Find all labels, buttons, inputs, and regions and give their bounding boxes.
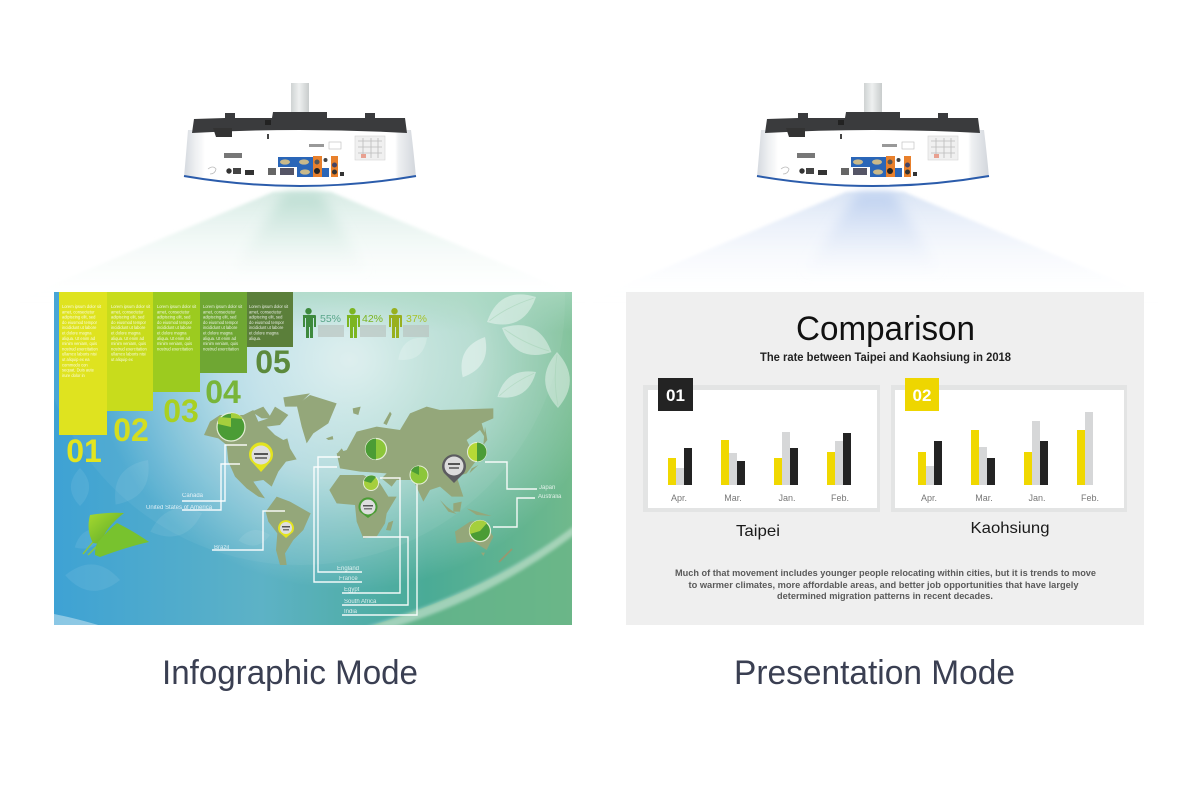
stat: 42 percent: 42%	[362, 313, 383, 325]
stripe text: 02: et dolore magna	[111, 330, 141, 336]
map marker: pie Europe	[366, 438, 386, 460]
map marker: pie Japan	[468, 442, 486, 462]
swoosh: bottom curve	[54, 526, 574, 627]
bars: Apr	[668, 448, 692, 485]
number 05: 05	[255, 344, 291, 380]
stripe text: 01: et dolore magna	[62, 330, 92, 336]
number 01: 01	[66, 433, 102, 469]
country labels: England	[337, 566, 359, 572]
caption: Presentation Mode: Presentation Mode	[734, 654, 1015, 692]
badge 02	[905, 378, 939, 411]
stripe text: 02: ullamco laboris nisi	[111, 352, 146, 357]
country labels: Australia	[538, 494, 562, 500]
country labels: Japan	[539, 485, 555, 491]
stripe text: 03: aliqua. Ut enim ad	[157, 336, 191, 341]
stripe text: 03: adipiscing elit, sed	[157, 315, 191, 320]
stripe text: 05: aliqua.	[249, 336, 261, 341]
stripe text: 04: amet, consectetur	[203, 309, 236, 314]
stat: 37 percent	[389, 308, 429, 338]
country labels: South Africa	[344, 599, 377, 605]
stripe text: 02: minim veniam, quis	[111, 341, 146, 346]
stripe text: 04: do eiusmod tempor	[203, 320, 239, 325]
paragraph: Much of that movement includes younger people relocating within cities, but it is trends to move	[675, 568, 1096, 579]
country labels: Canada	[182, 493, 204, 499]
country labels: United States of America	[146, 505, 213, 511]
number 03: 03	[163, 393, 199, 429]
stat: 37 percent: 37%	[406, 313, 427, 325]
projector: right	[757, 83, 989, 187]
stripe text: 05: incididunt ut labore	[249, 325, 284, 330]
stripe text: 05: amet, consectetur	[249, 309, 282, 314]
stripe text: 03: incididunt ut labore	[157, 325, 192, 330]
map pin: China	[442, 454, 466, 483]
stripe text: 01: ullamco laboris nisi	[62, 352, 97, 357]
label: Taipei: Taipei	[736, 523, 780, 540]
panel: infographic mode screen	[54, 292, 572, 625]
axis labels	[921, 493, 1099, 503]
caption: Infographic Mode: Infographic Mode	[162, 654, 418, 692]
bars: Feb	[1077, 412, 1093, 485]
projector: left	[184, 83, 416, 187]
stripe text: 05: adipiscing elit, sed	[249, 315, 283, 320]
bars: Jan	[774, 432, 798, 485]
stripe text: 01: irure dolor in	[62, 373, 85, 378]
axis labels: Apr.	[671, 493, 687, 503]
stripe 01	[59, 292, 107, 435]
stripe 05	[247, 292, 293, 347]
stripe text: 03: Lorem ipsum dolor sit	[157, 304, 197, 309]
stripe text: 01: Lorem ipsum dolor sit	[62, 304, 102, 309]
chart card: Kaohsiung	[891, 378, 1127, 512]
stripe text: 01: minim veniam, quis	[62, 341, 97, 346]
new zealand	[499, 549, 512, 562]
map marker: pie Egypt	[364, 475, 378, 490]
stripe text: 01: do eiusmod tempor	[62, 320, 98, 325]
country labels: India	[344, 609, 358, 615]
axis labels: Apr.	[921, 493, 937, 503]
stripe text: 01: nostrud exercitation	[62, 346, 98, 351]
stripe text: 03: do eiusmod tempor	[157, 320, 193, 325]
map marker: pie Australia	[470, 520, 490, 542]
badge 02: 02	[913, 386, 931, 405]
stripe text: 05: do eiusmod tempor	[249, 320, 285, 325]
stripe text: 05: Lorem ipsum dolor sit	[249, 304, 289, 309]
light beam: presentation projector	[588, 192, 1163, 300]
stripe text: 04: et dolore magna	[203, 330, 233, 336]
badge 01	[658, 378, 693, 411]
axis labels: Jan.	[1028, 493, 1046, 503]
country labels	[146, 485, 562, 615]
stripe text: 02: amet, consectetur	[111, 309, 144, 314]
stripe 02	[107, 292, 153, 411]
stripe text: 03: minim veniam, quis	[157, 341, 192, 346]
stat: 55 percent	[303, 308, 344, 338]
decorative leaves: faint lower left	[64, 452, 271, 593]
stripe text: 04: aliqua. Ut enim ad	[203, 336, 237, 341]
stripe text: 01: aliqua. Ut enim ad	[62, 336, 96, 341]
stripe text: 02: Lorem ipsum dolor sit	[111, 304, 151, 309]
stripe text: 03: amet, consectetur	[157, 309, 190, 314]
map pin: USA	[249, 442, 273, 472]
panel: presentation mode screen	[626, 292, 1144, 625]
axis labels: Feb.	[1081, 493, 1099, 503]
stripe text: 02: adipiscing elit, sed	[111, 315, 145, 320]
paragraph	[675, 568, 1096, 602]
stripe text: 02: aliqua. Ut enim ad	[111, 336, 145, 341]
stripe text: 05: et dolore magna	[249, 330, 279, 336]
stripe text: 02: do eiusmod tempor	[111, 320, 147, 325]
stripe text: 04: nostrud exercitation	[203, 346, 239, 351]
axis labels: Mar.	[975, 493, 993, 503]
stripe text: 01: adipiscing elit, sed	[62, 315, 96, 320]
world map	[204, 393, 493, 565]
axis labels	[671, 493, 849, 503]
number 02: 02	[113, 412, 149, 448]
number 04: 04	[205, 374, 241, 410]
stripe text: 01: sequat. Duis aute	[62, 368, 95, 373]
decorative leaves: top right	[398, 294, 570, 408]
stripe text: 02: ut aliquip ex	[111, 357, 133, 362]
bars: Feb	[827, 433, 851, 485]
stripe text: 04: Lorem ipsum dolor sit	[203, 304, 243, 309]
stripe text: 01: commodo con	[62, 362, 88, 367]
map marker: pie India	[410, 466, 428, 484]
bars: Jan	[1024, 421, 1048, 485]
country labels: Egypt	[344, 587, 360, 593]
stripe text: 01: incididunt ut labore	[62, 325, 97, 330]
label: Kaohsiung: Kaohsiung	[970, 520, 1050, 537]
stripe text: 02: nostrud exercitation	[111, 346, 147, 351]
map pin: Central Africa	[359, 497, 378, 518]
stripe text: 03: nostrud exercitation	[157, 346, 193, 351]
bars: Mar	[971, 430, 995, 485]
stripe text: 04: minim veniam, quis	[203, 341, 238, 346]
stat: 55 percent: 55%	[320, 313, 341, 325]
bars: Apr	[918, 441, 942, 485]
country labels: Brazil	[214, 545, 229, 551]
stripe text: 02: incididunt ut labore	[111, 325, 146, 330]
stripe text: 01: amet, consectetur	[62, 309, 95, 314]
axis labels: Feb.	[831, 493, 849, 503]
stripe text: 04: adipiscing elit, sed	[203, 315, 237, 320]
icon: green leaves	[83, 513, 149, 557]
stat: 42 percent	[347, 308, 386, 338]
axis labels: Jan.	[778, 493, 796, 503]
paragraph: to warmer climates, more affordable areas, and better job opportunities that have largely	[688, 580, 1079, 591]
title: Comparison	[796, 310, 975, 348]
paragraph: determined migration patterns in recent decades.	[777, 591, 993, 602]
bars: Mar	[721, 440, 745, 485]
stripe text: 03: et dolore magna	[157, 330, 187, 336]
badge 01: 01	[666, 386, 685, 405]
map pin: South America	[278, 520, 294, 538]
stripe 04	[200, 292, 247, 373]
stripe 03	[153, 292, 200, 392]
infographic canvas	[54, 83, 1144, 691]
connector lines	[182, 445, 537, 615]
axis labels: Mar.	[724, 493, 742, 503]
chart card: Taipei	[643, 378, 880, 512]
light beam: infographic projector	[15, 192, 590, 300]
stripe text: 01: ut aliquip ex ea	[62, 357, 90, 362]
country labels: France	[339, 576, 358, 582]
map marker: pie North America	[217, 413, 245, 441]
stripe text: 04: incididunt ut labore	[203, 325, 238, 330]
subtitle: The rate between Taipei and Kaohsiung in 2018	[760, 350, 1011, 364]
